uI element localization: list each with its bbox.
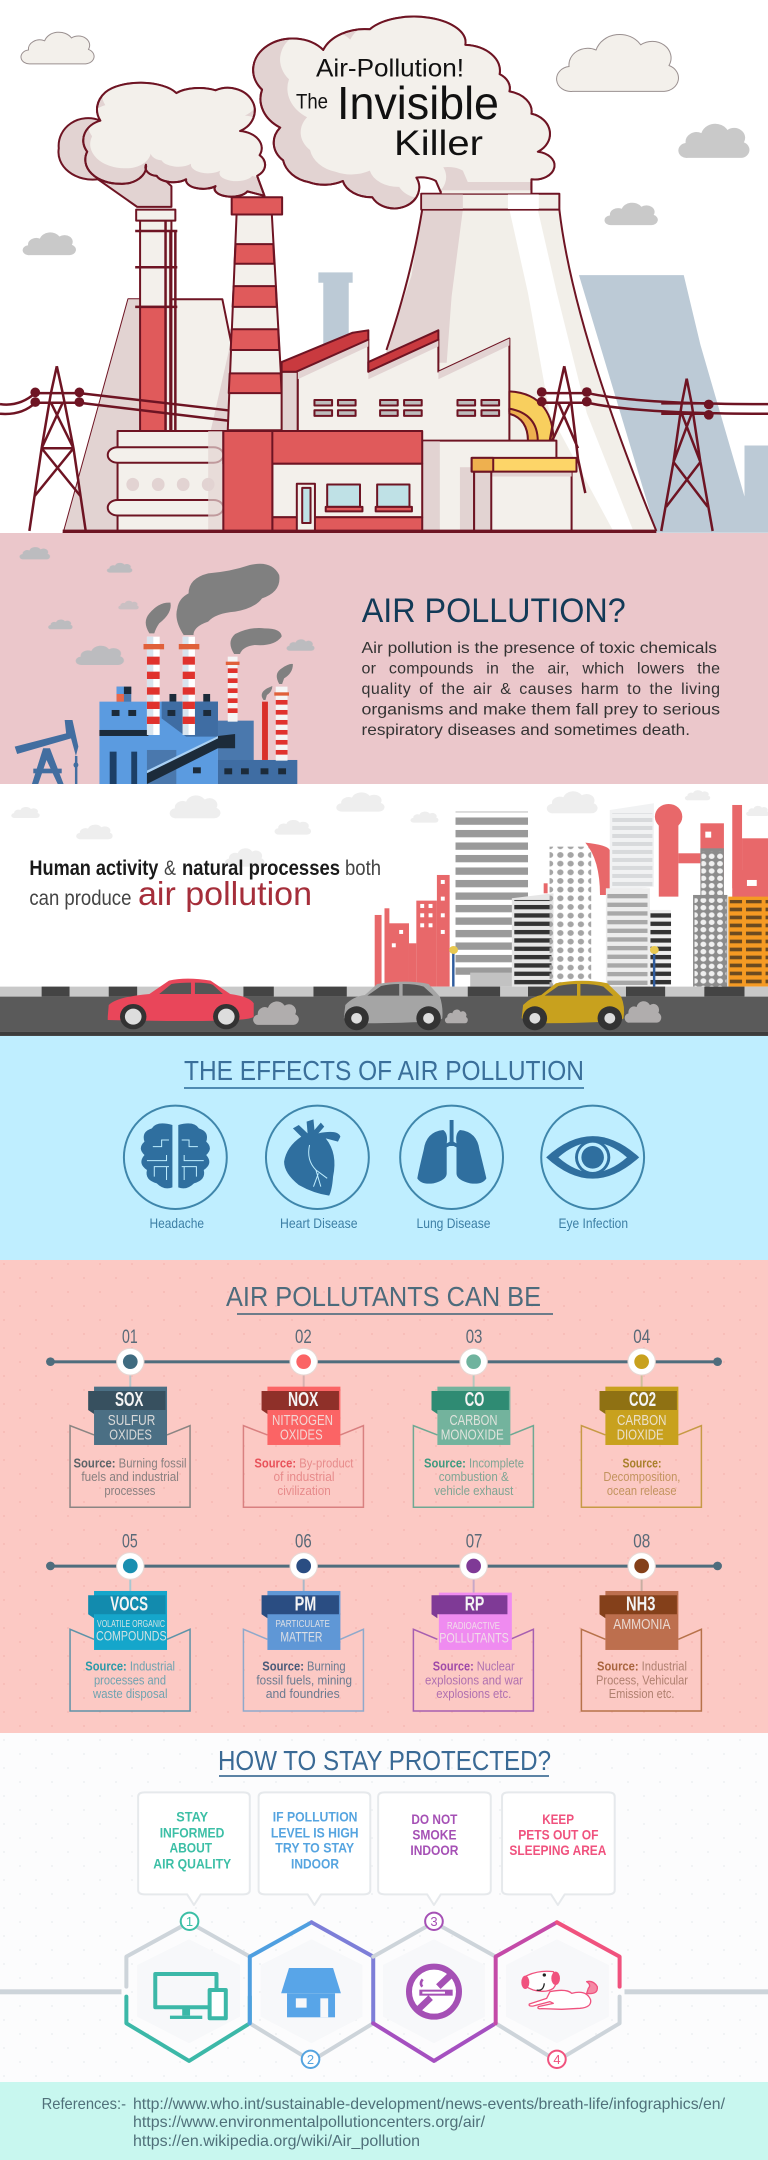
number circles <box>181 1913 566 2068</box>
street lamps <box>449 946 659 987</box>
effect labels: Heart Disease <box>280 1215 358 1231</box>
icon: house <box>281 1968 341 2017</box>
background grey clouds <box>20 547 314 665</box>
pollutant names <box>96 1412 670 1645</box>
source text: fossil fuels, mining <box>256 1672 352 1687</box>
references text: https://www.environmentalpollutioncenters.org/air/ <box>133 2114 486 2131</box>
icon: eye <box>541 1106 644 1209</box>
card text: stay informed: STAY <box>176 1809 209 1825</box>
card text: keep pets out <box>509 1811 606 1858</box>
speech cards <box>138 1792 615 1905</box>
striped grey tower <box>456 812 528 975</box>
panel: air pollutants <box>0 1260 768 1733</box>
factory windows <box>314 400 499 416</box>
step numbers: 02 <box>295 1327 312 1348</box>
source text: Source: Industrial <box>85 1659 175 1674</box>
small white clouds <box>21 32 678 91</box>
card text: stay informed <box>153 1809 232 1871</box>
card text: keep pets out: KEEP <box>542 1811 574 1827</box>
pollutant abbreviations: PM <box>295 1594 316 1616</box>
right annex <box>422 441 576 533</box>
pollutant names: RADIOACTIVE <box>447 1621 500 1632</box>
pollutant names: COMPOUNDS <box>96 1628 167 1644</box>
source text: Source: Incomplete <box>424 1455 524 1470</box>
source text: Source: Nuclear <box>433 1659 515 1674</box>
heading: AIR POLLUTION? <box>362 592 626 630</box>
source text: Process, Vehicular <box>596 1672 689 1687</box>
card 04 CO2 <box>581 1348 701 1507</box>
card 05 VOCS <box>70 1553 190 1711</box>
road <box>0 987 768 1036</box>
pollutant abbreviations: VOCS <box>110 1594 148 1616</box>
panel: air pollution definition <box>0 533 768 784</box>
panel: how to stay protected <box>0 1733 768 2082</box>
connector line <box>0 1989 768 1994</box>
card 07 RP <box>413 1553 533 1711</box>
grey car <box>344 982 443 1030</box>
boiler block <box>108 431 223 533</box>
card text: stay indoor: LEVEL IS HIGH <box>271 1824 359 1840</box>
number labels <box>186 1914 561 2067</box>
source text: processes and <box>94 1672 166 1687</box>
card text: stay informed: INFORMED <box>160 1824 224 1840</box>
number labels: 1 <box>186 1914 193 1929</box>
power lines <box>0 387 768 421</box>
step numbers: 03 <box>466 1327 482 1348</box>
source text: combustion & <box>439 1469 509 1484</box>
effect labels: Eye Infection <box>558 1215 628 1231</box>
title <box>296 54 499 163</box>
statement text: both <box>345 857 381 880</box>
pollutant names: MATTER <box>280 1629 322 1645</box>
card text: stay indoor: INDOOR <box>291 1855 339 1871</box>
icon: no smoking <box>409 1967 459 2017</box>
card 03 CO <box>413 1348 533 1507</box>
main cooling tower <box>386 194 656 531</box>
title: The <box>296 91 328 114</box>
black striped building <box>512 893 553 987</box>
source text: explosions etc. <box>436 1686 511 1701</box>
step numbers: 07 <box>466 1531 482 1552</box>
pollutant abbreviations: NH3 <box>626 1594 655 1616</box>
statement text: natural processes <box>182 857 340 880</box>
timeline row 1 <box>46 1357 722 1366</box>
title: Air-Pollution! <box>316 54 464 82</box>
yellow pipe <box>509 391 553 441</box>
card 02 NOX <box>243 1348 363 1507</box>
source text: Source: Burning <box>262 1659 346 1674</box>
number labels: 2 <box>307 2052 314 2067</box>
pollutant abbreviations: RP <box>465 1594 484 1616</box>
icon: heart <box>266 1106 369 1209</box>
right pylon <box>661 379 713 531</box>
icon: computer and phone <box>155 1974 226 2019</box>
grey mid-rise buildings <box>606 888 650 987</box>
effect labels: Lung Disease <box>416 1215 491 1231</box>
card text: do not smoke: INDOOR <box>410 1842 458 1858</box>
back blocks <box>218 721 254 761</box>
illustration: blue factory with smoke <box>15 547 314 784</box>
timeline row 2 <box>46 1562 722 1570</box>
ground line <box>63 530 656 533</box>
statement text: Human activity <box>29 857 159 880</box>
source text: civilization <box>277 1483 331 1498</box>
source text: fuels and industrial <box>81 1469 179 1484</box>
red low-rise buildings <box>375 875 450 987</box>
grey clouds <box>23 124 749 255</box>
source text: waste disposal <box>92 1686 168 1701</box>
card text: stay indoor: IF POLLUTION <box>273 1809 358 1825</box>
step numbers: 08 <box>633 1531 650 1552</box>
heading: AIR POLLUTANTS CAN BE <box>226 1281 541 1312</box>
card text: stay informed: AIR QUALITY <box>153 1855 232 1871</box>
factory with sawtooth roof <box>282 330 509 441</box>
statement text: & <box>164 857 176 880</box>
source text: Emission etc. <box>609 1686 674 1701</box>
definition text: Air pollution is the presence of toxic chemicals <box>362 640 717 657</box>
source text: processes <box>104 1483 156 1498</box>
card text: keep pets out: SLEEPING AREA <box>509 1842 606 1858</box>
oil pump jack <box>15 720 78 784</box>
pollutant names: VOLATILE ORGANIC <box>97 1619 165 1630</box>
definition text: quality of the air & causes harm to the living <box>362 681 720 698</box>
panel: hero illustration <box>0 0 768 533</box>
statement text: air pollution <box>138 875 312 912</box>
icon: dog <box>521 1971 597 2009</box>
step numbers: 06 <box>295 1531 312 1552</box>
source text: and foundries <box>266 1686 340 1701</box>
effect labels: Headache <box>150 1215 204 1231</box>
city skyline <box>0 790 768 1036</box>
red car <box>108 979 254 1029</box>
hexagon diagram <box>0 1792 768 2068</box>
card text: stay indoor <box>271 1809 359 1871</box>
pollutant abbreviations: SOX <box>115 1389 144 1411</box>
statement text <box>29 857 381 912</box>
step numbers: 05 <box>122 1531 138 1552</box>
yellow car <box>522 981 624 1030</box>
title: Invisible <box>337 77 499 129</box>
red building <box>223 431 422 533</box>
source text: ocean release <box>607 1483 676 1498</box>
source text: explosions and war <box>425 1672 524 1687</box>
pollutant abbreviations <box>110 1389 656 1616</box>
striped chimney <box>228 197 284 430</box>
title cloud <box>252 16 556 210</box>
card text: do not smoke: DO NOT <box>411 1811 458 1827</box>
source text: vehicle exhaust <box>434 1483 514 1498</box>
left pylon <box>29 366 86 531</box>
pollutant names: NITROGEN <box>272 1412 333 1429</box>
number labels: 4 <box>553 2052 561 2067</box>
definition text <box>362 640 720 739</box>
references text: http://www.who.int/sustainable-development/news-events/breath-life/infographics/en/ <box>133 2096 726 2113</box>
red tower with spire <box>655 804 768 898</box>
pollutant names: AMMONIA <box>613 1616 670 1633</box>
card 06 PM <box>243 1553 363 1711</box>
icon: lungs <box>400 1106 503 1209</box>
source text: Decomposition, <box>603 1469 680 1484</box>
thin chimney <box>135 210 177 431</box>
panel: references <box>0 2082 768 2160</box>
heading: THE EFFECTS OF AIR POLLUTION <box>184 1055 584 1086</box>
source text <box>74 1455 689 1701</box>
source text: of industrial <box>274 1469 335 1484</box>
inner hexagons <box>137 1939 609 2043</box>
exhaust clouds <box>253 1001 661 1025</box>
card text: keep pets out: PETS OUT OF <box>518 1826 599 1842</box>
card text: stay indoor: TRY TO STAY <box>275 1840 355 1856</box>
source text: Source: <box>622 1455 662 1470</box>
pollutant names: OXIDES <box>280 1426 323 1443</box>
definition text: or compounds in the air, which lowers the <box>362 660 720 678</box>
pollutant abbreviations: CO <box>465 1389 484 1411</box>
step numbers <box>122 1327 651 1552</box>
source text: Source: Burning fossil <box>74 1455 187 1470</box>
card text: do not smoke <box>410 1811 458 1858</box>
timelines <box>46 1348 722 1711</box>
illustration: power plant and factory <box>0 6 768 533</box>
heading: HOW TO STAY PROTECTED? <box>218 1745 551 1776</box>
background blue chimney and tower <box>318 272 768 533</box>
hexagon outlines <box>126 1922 620 2061</box>
step numbers: 04 <box>633 1327 651 1348</box>
card text: do not smoke: SMOKE <box>412 1826 456 1842</box>
dotted tower <box>550 847 591 987</box>
red curved building <box>585 843 610 895</box>
pale clouds <box>11 790 768 867</box>
icon: brain <box>124 1106 227 1209</box>
title: Killer <box>394 124 483 163</box>
striped chimneys <box>144 637 289 761</box>
card 01 SOX <box>70 1348 190 1507</box>
statement text: can produce <box>29 887 131 910</box>
left cooling tower <box>64 299 284 533</box>
pollutant names: DIOXIDE <box>617 1426 664 1443</box>
pollutant names: SULFUR <box>108 1412 155 1429</box>
definition text: respiratory diseases and sometimes death. <box>362 722 690 739</box>
left smoke cloud <box>57 82 266 208</box>
effect labels <box>150 1215 628 1231</box>
pollutant names: PARTICULATE <box>276 1618 330 1630</box>
source text: Source: Industrial <box>597 1659 687 1674</box>
orange building <box>728 897 768 987</box>
middle pylon <box>541 366 588 493</box>
pale tall tower <box>610 803 654 893</box>
references text: References:- <box>42 2096 126 2113</box>
card text: stay informed: ABOUT <box>170 1840 212 1856</box>
main blue building <box>99 702 218 784</box>
pollutant names: MONOXIDE <box>441 1426 504 1443</box>
panel: human activity and city traffic <box>0 784 768 1036</box>
pollutant names: POLLUTANTS <box>439 1629 509 1645</box>
step numbers: 01 <box>122 1327 138 1348</box>
pollutant abbreviations: CO2 <box>629 1389 656 1411</box>
pollutant abbreviations: NOX <box>288 1389 319 1411</box>
references text <box>42 2096 726 2150</box>
card 08 NH3 <box>581 1553 701 1711</box>
panel: effects of air pollution <box>0 1036 768 1260</box>
references text: https://en.wikipedia.org/wiki/Air_pollution <box>133 2133 420 2150</box>
number labels: 3 <box>430 1914 438 1929</box>
pollutant names: OXIDES <box>109 1426 152 1443</box>
pollutant names: CARBON <box>617 1412 666 1429</box>
source text: Source: By-product <box>254 1455 354 1470</box>
definition text: organisms and make them fall prey to serious <box>362 702 720 718</box>
icons <box>124 1106 644 1209</box>
smoke plumes <box>146 564 293 700</box>
pollutant names: CARBON <box>450 1412 498 1429</box>
